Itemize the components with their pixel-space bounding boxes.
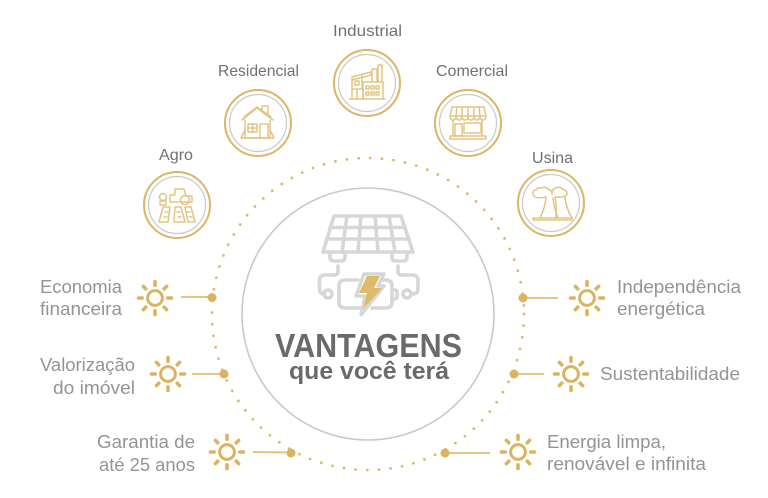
advantage: Energia limpa: Energia limpa, (547, 432, 666, 452)
segment: Agro: Agro (159, 147, 193, 164)
advantage: Sustentabilidade: Sustentabilidade (600, 364, 740, 384)
segment: Agro (144, 147, 210, 238)
central circle (242, 188, 494, 440)
icon: house (241, 106, 274, 138)
advantage: Valorização do imóvel (40, 355, 228, 398)
advantage: Valorização do imóvel: Valorização (40, 355, 135, 375)
icon: storefront (450, 107, 486, 139)
advantage: Garantia de até 25 anos (97, 432, 296, 475)
advantage: Energia limpa: renovável e infinita (547, 454, 707, 474)
advantage: Valorização do imóvel: do imóvel (53, 378, 135, 398)
advantage: Economia financeira: financeira (40, 299, 123, 319)
advantage: Independência energética (518, 277, 742, 319)
battery (339, 280, 397, 308)
icon: solar panel and battery (320, 216, 418, 315)
advantage: Sustentabilidade (510, 358, 740, 390)
dotted orbit (212, 158, 524, 470)
segment: Residencial: Residencial (218, 63, 299, 80)
segment: Industrial: Industrial (333, 23, 402, 40)
advantage: Economia financeira: Economia (40, 277, 123, 297)
solar panel (323, 216, 413, 261)
icon: cooling towers (533, 187, 572, 220)
advantage: Garantia de até 25 anos: até 25 anos (99, 455, 195, 475)
segment: Comercial (435, 63, 508, 156)
advantage: Independência energética: energética (617, 299, 706, 319)
title (275, 327, 462, 385)
title: VANTAGENS (275, 327, 462, 364)
segment: Comercial: Comercial (436, 63, 508, 80)
segment: Industrial (333, 23, 402, 116)
subtitle: que você terá (289, 358, 450, 385)
advantage: Economia financeira (40, 277, 216, 319)
lightning bolt (356, 274, 384, 315)
connector wires (320, 266, 418, 298)
segment: Usina: Usina (532, 150, 573, 167)
advantage: Garantia de até 25 anos: Garantia de (97, 432, 195, 452)
icon: tractor and field (159, 189, 195, 222)
icon: factory (349, 65, 385, 99)
segment: Usina (518, 150, 584, 236)
segment: Residencial (218, 63, 299, 156)
advantage: Energia limpa (440, 432, 707, 474)
advantage: Independência energética: Independência (617, 277, 742, 297)
